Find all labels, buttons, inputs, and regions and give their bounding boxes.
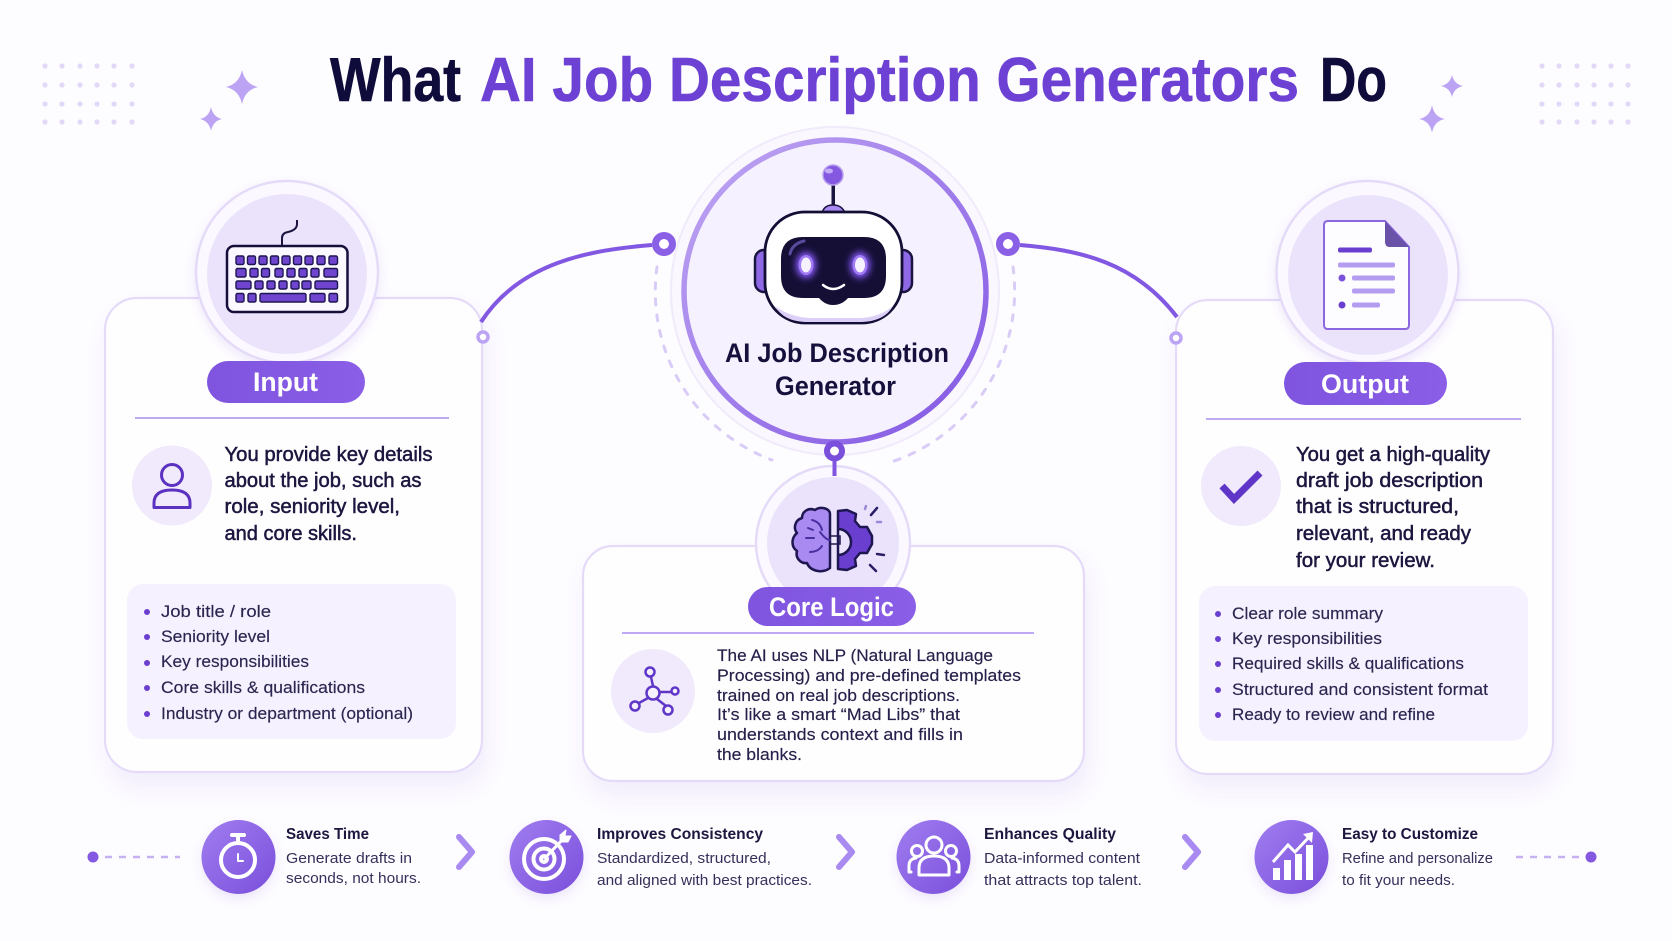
icon: keyboard	[196, 181, 378, 363]
connector: dashed arc around hub	[655, 267, 1015, 463]
arrow: input to hub	[478, 236, 672, 342]
benefit: saves time: seconds, not hours.	[286, 870, 421, 887]
title: AI Job Description Generators	[480, 46, 1299, 115]
hub label	[725, 338, 949, 401]
decoration: left sparkles	[200, 70, 258, 131]
output description	[1296, 444, 1490, 572]
benefit: easy to customize: Refine and personalize	[1342, 850, 1493, 867]
benefit: enhances quality	[896, 820, 1142, 894]
label pill: input: Input	[253, 367, 318, 397]
input description	[224, 444, 432, 545]
decoration: right sparkles	[1419, 75, 1463, 133]
icon: brain and gear	[756, 466, 910, 620]
arrow: hub to output	[1000, 236, 1181, 343]
decoration: left dot grid	[42, 63, 135, 125]
output list box: Key responsibilities	[1232, 629, 1382, 648]
icon: people	[909, 837, 959, 875]
title: What	[330, 46, 461, 115]
output list box: Clear role summary	[1232, 604, 1384, 623]
output description: draft job description	[1296, 470, 1483, 492]
core logic description: It’s like a smart “Mad Libs” that	[717, 705, 960, 724]
connector: hub to core logic	[827, 444, 842, 476]
input description: role, seniority level,	[224, 496, 400, 518]
benefit: enhances quality: that attracts top talent.	[984, 872, 1142, 889]
output card	[1176, 300, 1553, 774]
benefit: easy to customize: Easy to Customize	[1342, 826, 1478, 843]
benefit: saves time: Generate drafts in	[286, 850, 412, 867]
core logic card	[583, 546, 1084, 781]
core logic description: understands context and fills in	[717, 725, 963, 744]
core logic description	[717, 646, 1021, 764]
arrow: chevron 2	[839, 837, 852, 867]
benefit: easy to customize	[1254, 820, 1493, 894]
panel: input	[105, 181, 482, 772]
benefit strip	[88, 820, 1596, 894]
output list box: Ready to review and refine	[1232, 705, 1435, 724]
arrow: chevron 3	[1185, 837, 1198, 867]
label pill: input	[207, 361, 365, 403]
central hub	[671, 127, 999, 455]
input description: You provide key details	[224, 444, 432, 466]
benefit: saves time	[202, 820, 421, 894]
benefit: improves consistency: Standardized, structured,	[597, 850, 771, 867]
icon: check mark	[1201, 446, 1281, 526]
benefit: enhances quality: Enhances Quality	[984, 826, 1116, 843]
input list box	[127, 584, 456, 739]
panel: output	[1176, 181, 1553, 774]
output description: relevant, and ready	[1296, 523, 1471, 545]
title: Do	[1320, 46, 1387, 115]
icon: target	[524, 830, 571, 879]
decoration: right dash line	[1516, 852, 1596, 862]
input description: about the job, such as	[224, 470, 422, 492]
label pill: core logic: Core Logic	[769, 592, 894, 622]
label pill: core logic	[748, 587, 916, 626]
benefit: improves consistency: Improves Consistency	[597, 826, 763, 843]
icon: growth chart	[1273, 832, 1313, 880]
input list box: Industry or department (optional)	[161, 704, 413, 723]
icon: stopwatch	[221, 835, 255, 877]
hub label: AI Job Description	[725, 338, 949, 368]
core logic description: the blanks.	[717, 745, 802, 764]
benefit: easy to customize: to fit your needs.	[1342, 872, 1455, 889]
benefit: improves consistency	[510, 820, 812, 894]
input card	[105, 298, 482, 772]
hub label: Generator	[775, 371, 896, 401]
decoration: left dash line	[88, 852, 180, 862]
icon: robot	[755, 165, 912, 323]
icon: network nodes	[611, 649, 695, 733]
core logic description: The AI uses NLP (Natural Language	[717, 646, 993, 665]
arrow: chevron 1	[459, 837, 472, 867]
icon: document	[1276, 181, 1458, 363]
output description: for your review.	[1296, 550, 1435, 572]
output description: that is structured,	[1296, 496, 1459, 518]
input list box: Job title / role	[161, 602, 271, 621]
output list box: Structured and consistent format	[1232, 680, 1488, 699]
output description: You get a high-quality	[1296, 444, 1490, 466]
output list box	[1199, 586, 1528, 741]
icon: person	[132, 446, 212, 526]
benefit: improves consistency: and aligned with best practices.	[597, 872, 812, 889]
input list box: Key responsibilities	[161, 652, 309, 671]
input list box: Seniority level	[161, 627, 270, 646]
core logic description: Processing) and pre-defined templates	[717, 666, 1021, 685]
label pill: output: Output	[1321, 369, 1409, 399]
output list box: Required skills & qualifications	[1232, 654, 1464, 673]
panel: core logic	[583, 466, 1084, 781]
benefit: enhances quality: Data-informed content	[984, 850, 1141, 867]
input list box: Core skills & qualifications	[161, 678, 365, 697]
core logic description: trained on real job descriptions.	[717, 686, 960, 705]
input description: and core skills.	[224, 523, 357, 545]
benefit: saves time: Saves Time	[286, 826, 369, 843]
decoration: right dot grid	[1539, 63, 1631, 125]
label pill: output	[1284, 362, 1447, 405]
